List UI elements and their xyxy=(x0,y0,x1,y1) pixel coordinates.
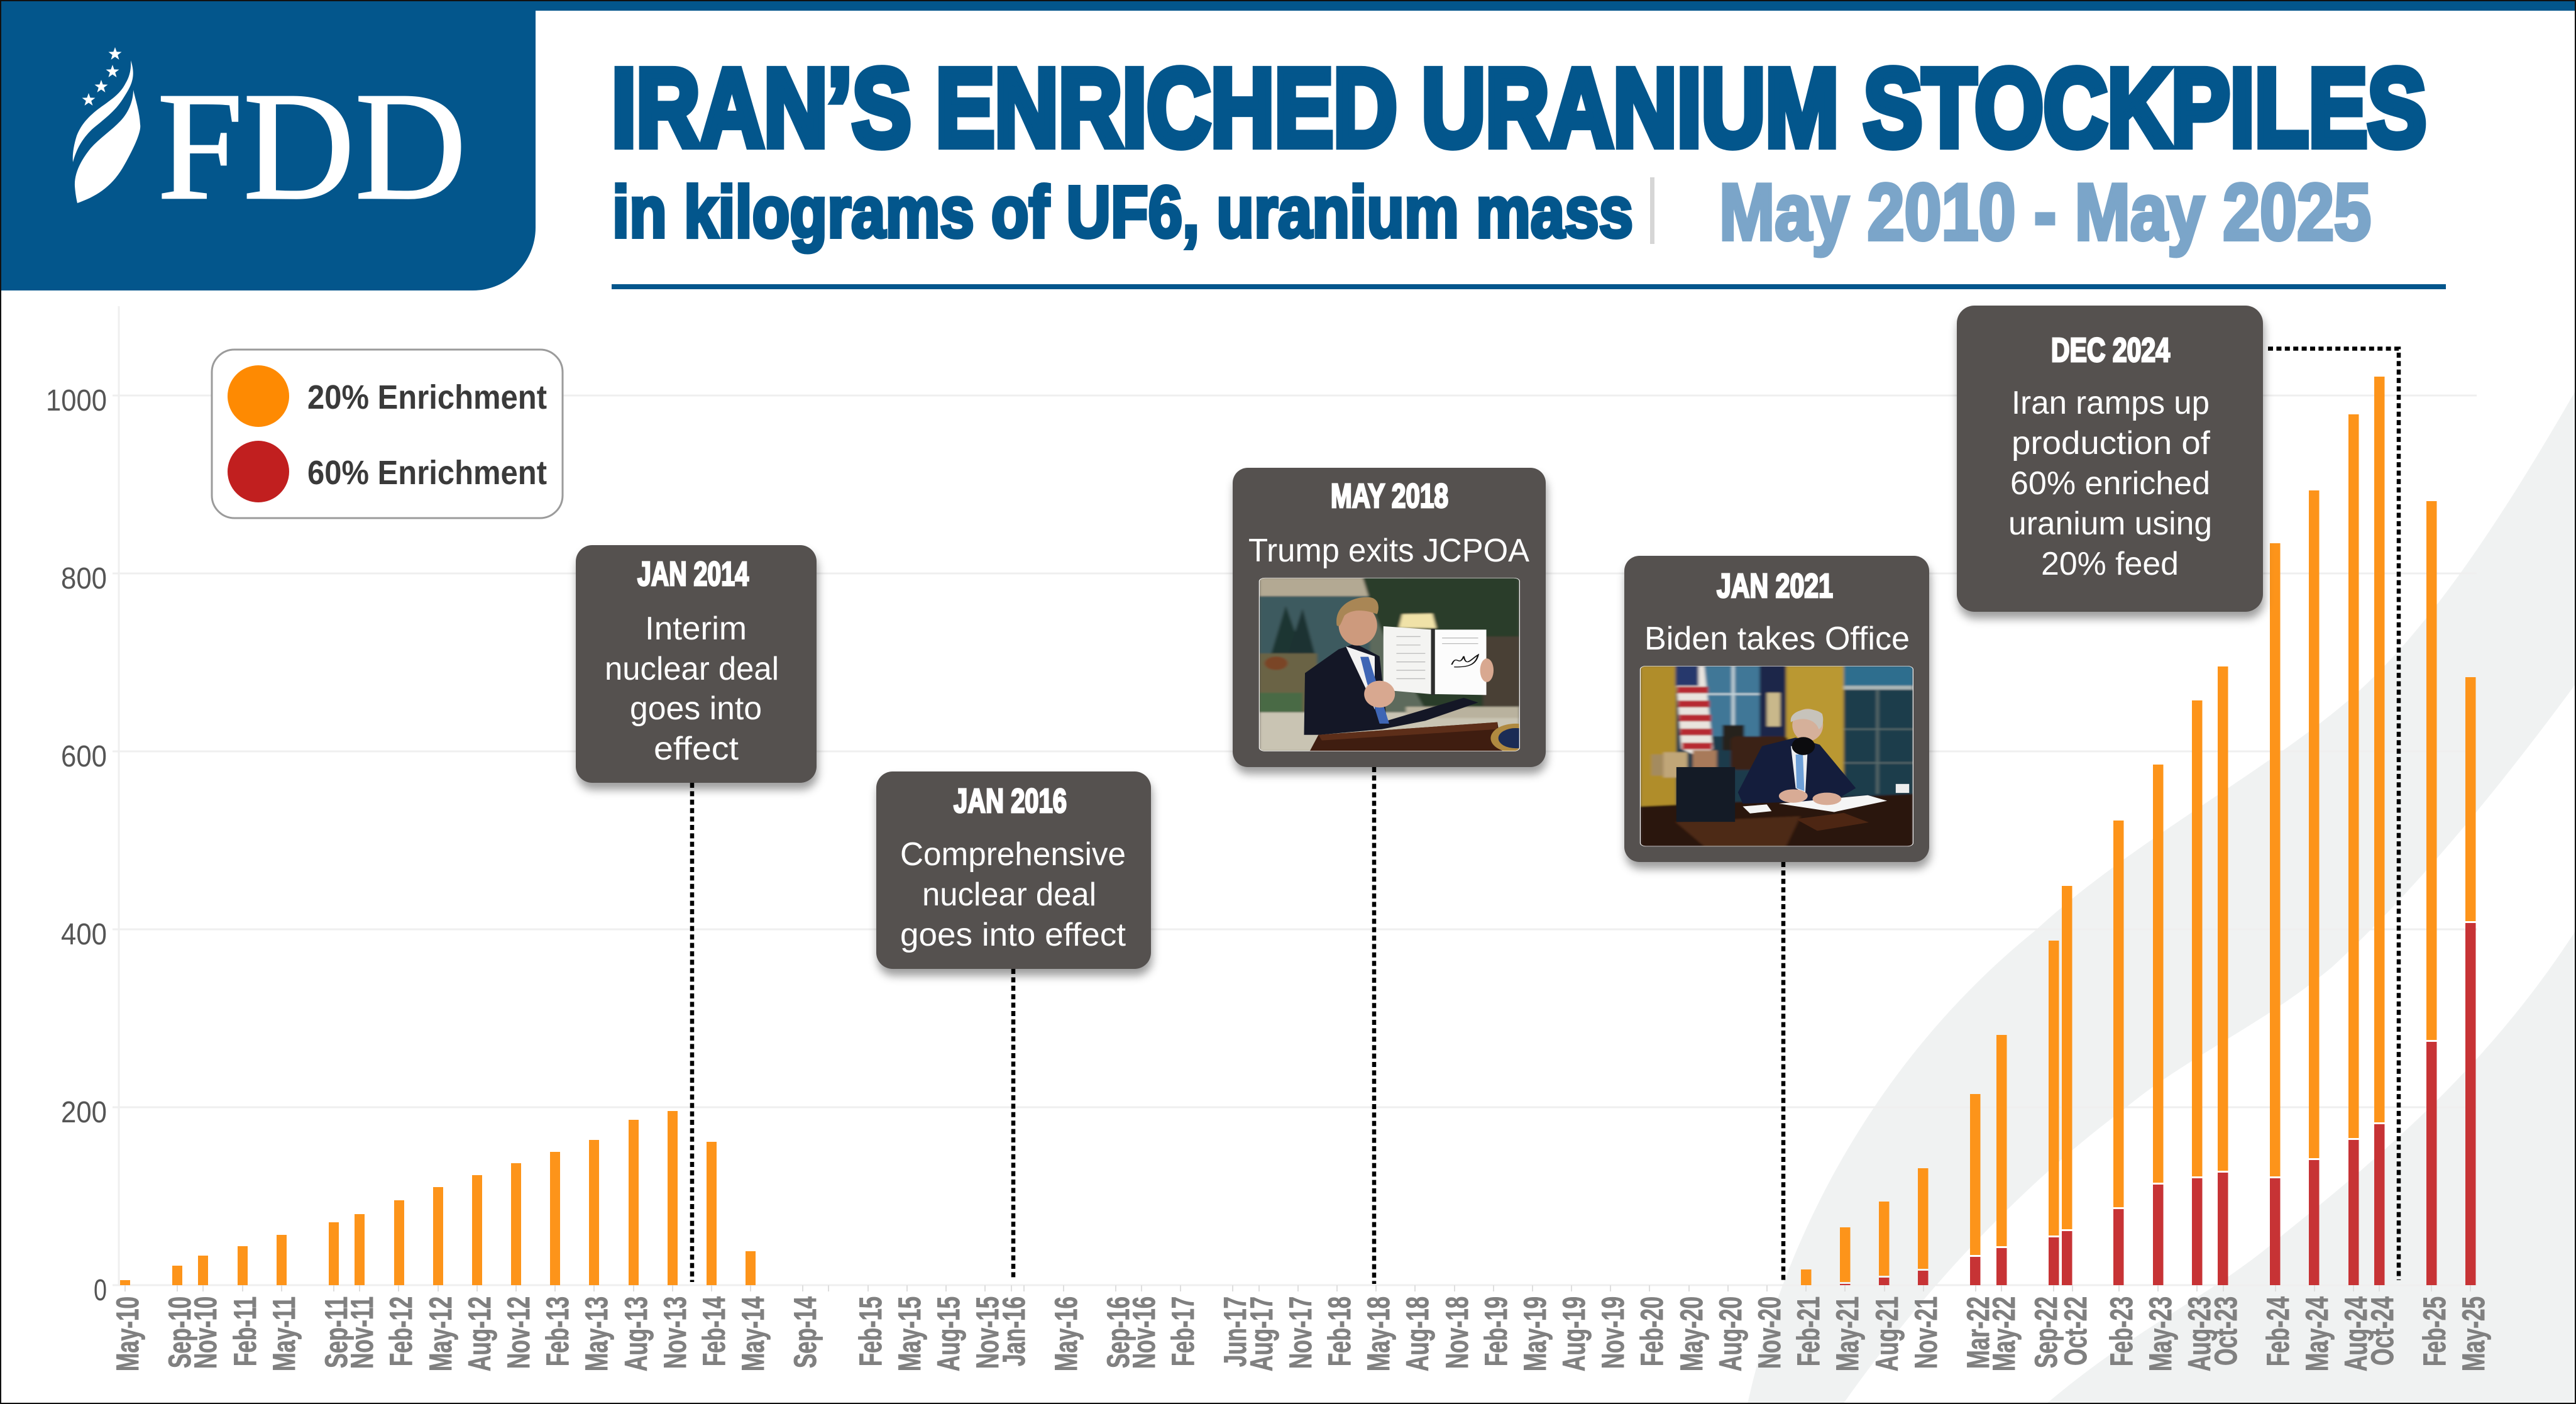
dotted leader lines xyxy=(692,348,2399,1284)
x axis labels: Aug-18 xyxy=(1400,1296,1435,1371)
callout: Jan 2016: JAN 2016 xyxy=(954,782,1067,820)
callout: May 2018: MAY 2018 xyxy=(1331,477,1448,515)
legend label: 20%: 20% Enrichment xyxy=(307,379,547,416)
bars: 20% enrichment only, 2010-2014 xyxy=(120,1111,1812,1285)
x axis labels: May-11 xyxy=(267,1296,302,1371)
bars: 60% enrichment segments, 2021-2025 xyxy=(1840,923,2475,1285)
date range: May 2010 - May 2025 xyxy=(1719,167,2371,257)
x axis labels: May-14 xyxy=(735,1296,771,1371)
legend label: 60%: 60% Enrichment xyxy=(307,454,547,492)
x axis labels: Sep-14 xyxy=(788,1296,823,1368)
x axis labels: Aug-12 xyxy=(462,1296,497,1371)
x axis labels: Aug-19 xyxy=(1556,1296,1592,1371)
callout: Dec 2024: 60% enriched xyxy=(2010,465,2210,502)
x axis labels: Feb-13 xyxy=(540,1296,575,1366)
x axis labels: Sep-22 xyxy=(2028,1296,2064,1368)
header rule xyxy=(612,284,2446,289)
x axis labels: May-13 xyxy=(579,1296,614,1371)
x axis labels: Aug-24 xyxy=(2338,1296,2374,1371)
bars: 20% enrichment segments, 2021-2025 xyxy=(1840,377,2475,1282)
subtitle divider xyxy=(1650,177,1654,244)
callout: Dec 2024 xyxy=(1957,306,2263,612)
x axis labels: Oct-22 xyxy=(2058,1296,2093,1366)
x axis labels: Feb-17 xyxy=(1165,1296,1201,1366)
y axis labels xyxy=(46,384,107,1307)
x axis labels: Nov-10 xyxy=(188,1296,223,1369)
x axis labels: Nov-17 xyxy=(1283,1296,1318,1369)
x axis ticks xyxy=(125,1285,2470,1291)
x axis labels: Nov-18 xyxy=(1439,1296,1475,1369)
x axis labels: Nov-13 xyxy=(658,1296,693,1369)
x axis labels: Aug-21 xyxy=(1869,1296,1905,1371)
x axis labels: May-25 xyxy=(2456,1296,2491,1371)
x axis labels: Mar-22 xyxy=(1961,1296,1996,1369)
x axis labels: Feb-11 xyxy=(228,1296,263,1366)
callout: Jan 2021: JAN 2021 xyxy=(1717,567,1833,605)
callout: Dec 2024: production of xyxy=(2012,425,2211,462)
x axis labels: Nov-20 xyxy=(1752,1296,1787,1369)
x axis labels: Feb-20 xyxy=(1634,1296,1670,1366)
callout: May 2018 xyxy=(1233,468,1546,767)
x axis labels: Oct-24 xyxy=(2365,1296,2400,1366)
x axis labels: May-12 xyxy=(423,1296,458,1371)
x axis labels: May-24 xyxy=(2299,1296,2335,1371)
x axis labels: Feb-14 xyxy=(696,1296,732,1366)
callout: Jan 2021: Biden takes Office xyxy=(1644,621,1910,657)
grid lines xyxy=(113,306,2477,1285)
callout: Dec 2024: Iran ramps up xyxy=(2012,385,2210,421)
x axis labels: Aug-20 xyxy=(1713,1296,1748,1371)
x axis labels: Aug-15 xyxy=(931,1296,966,1371)
subtitle: in kilograms of UF6, uranium mass xyxy=(612,171,1633,253)
y axis labels: 1000 xyxy=(46,384,107,417)
callout: Dec 2024: uranium using xyxy=(2008,506,2212,542)
x axis labels: Feb-21 xyxy=(1791,1296,1826,1366)
x axis labels: May-19 xyxy=(1517,1296,1553,1371)
x axis labels: Oct-23 xyxy=(2208,1296,2243,1366)
callout: Dec 2024: DEC 2024 xyxy=(2051,331,2170,369)
logo wordmark: FDD xyxy=(157,61,466,232)
x axis labels: Aug-23 xyxy=(2182,1296,2217,1371)
FDD logo xyxy=(73,47,466,232)
callout: Jan 2016: nuclear deal xyxy=(922,876,1096,913)
y axis labels: 0 xyxy=(94,1274,107,1307)
legend swatch: 20% xyxy=(228,365,289,427)
background swoosh xyxy=(1748,390,2576,1404)
callout: Jan 2016 xyxy=(876,771,1151,969)
x axis labels: Feb-23 xyxy=(2104,1296,2139,1366)
callout: Jan 2014: goes into xyxy=(630,690,762,727)
x axis labels: Aug-17 xyxy=(1244,1296,1279,1371)
photo: Biden signing xyxy=(1640,666,1913,846)
callout: Jan 2014: JAN 2014 xyxy=(637,555,749,593)
y axis labels: 800 xyxy=(61,562,107,595)
y axis labels: 600 xyxy=(61,740,107,773)
x axis labels: Feb-25 xyxy=(2417,1296,2452,1366)
header band xyxy=(0,0,2576,290)
callout: Jan 2016: Comprehensive xyxy=(900,836,1126,873)
y axis labels: 200 xyxy=(61,1096,107,1129)
x axis labels: May-15 xyxy=(892,1296,927,1371)
x axis labels: Nov-12 xyxy=(501,1296,536,1369)
legend xyxy=(212,350,563,518)
callout: Jan 2016: goes into effect xyxy=(900,917,1126,953)
x axis labels: Feb-18 xyxy=(1322,1296,1357,1366)
x axis labels: Sep-16 xyxy=(1101,1296,1136,1368)
photo: Trump signing xyxy=(1259,578,1541,753)
x axis labels: Jan-16 xyxy=(996,1296,1032,1366)
x axis labels: Jun-17 xyxy=(1218,1296,1253,1367)
callout: Jan 2014 xyxy=(576,545,817,783)
x axis labels: Nov-16 xyxy=(1126,1296,1162,1369)
legend swatch: 60% xyxy=(228,441,289,502)
icon: stars and flame mark xyxy=(73,47,140,203)
x axis labels: May-18 xyxy=(1361,1296,1396,1371)
x axis labels: May-21 xyxy=(1830,1296,1865,1371)
x axis labels: May-10 xyxy=(110,1296,145,1371)
bar chart: stockpile bars xyxy=(120,377,2475,1285)
callout: Jan 2014: nuclear deal xyxy=(605,651,779,687)
x axis labels: May-23 xyxy=(2143,1296,2178,1371)
x axis labels: Feb-15 xyxy=(853,1296,888,1366)
callout: Dec 2024: 20% feed xyxy=(2041,546,2179,582)
callout: May 2018: Trump exits JCPOA xyxy=(1248,533,1529,569)
x axis labels xyxy=(110,1296,2491,1371)
x axis labels: Nov-21 xyxy=(1908,1296,1944,1369)
x axis labels: Nov-19 xyxy=(1595,1296,1631,1369)
callout: Jan 2014: Interim xyxy=(645,611,747,647)
x axis labels: Sep-11 xyxy=(319,1296,354,1368)
x axis labels: May-16 xyxy=(1049,1296,1084,1371)
x axis labels: Sep-10 xyxy=(162,1296,197,1368)
callout: Jan 2014: effect xyxy=(654,731,739,767)
x axis labels: Aug-13 xyxy=(619,1296,654,1371)
x axis labels: May-20 xyxy=(1674,1296,1709,1371)
y axis labels: 400 xyxy=(61,918,107,951)
x axis labels: May-22 xyxy=(1986,1296,2022,1371)
callout: Jan 2021 xyxy=(1624,556,1929,862)
x axis labels: Nov-11 xyxy=(344,1296,380,1369)
x axis labels: Nov-15 xyxy=(970,1296,1005,1369)
x axis labels: Feb-19 xyxy=(1478,1296,1514,1366)
x axis labels: Feb-12 xyxy=(383,1296,419,1366)
x axis labels: Feb-24 xyxy=(2260,1296,2296,1366)
